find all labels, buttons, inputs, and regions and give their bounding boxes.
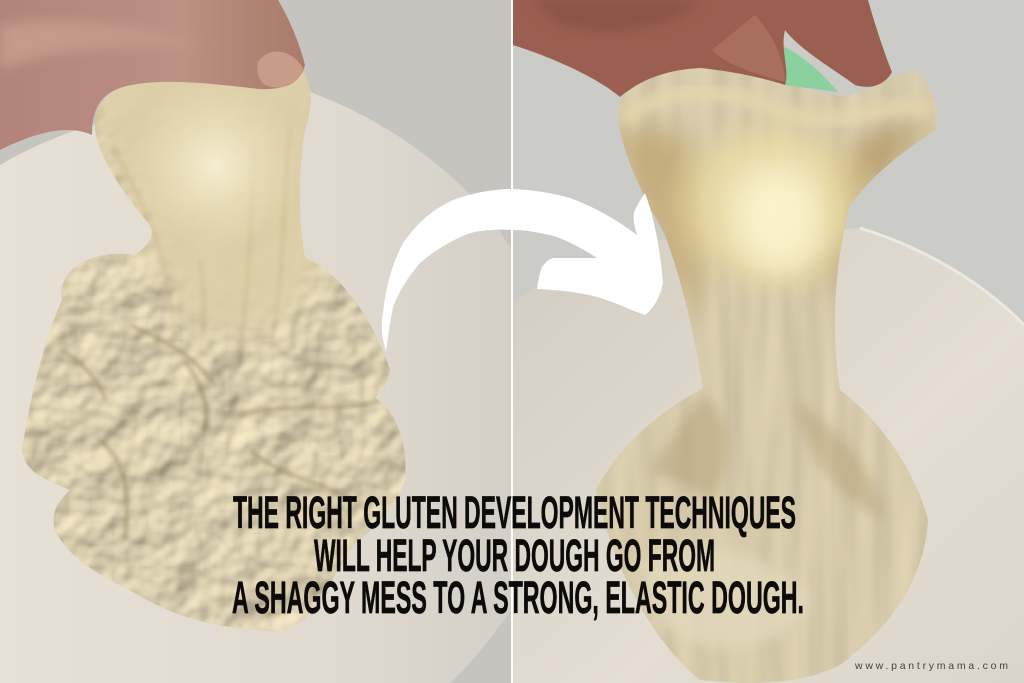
elastic dough xyxy=(590,60,940,683)
panel: left photo, shaggy dough xyxy=(0,0,511,683)
arrow: curved white arrow from left to right xyxy=(382,189,663,351)
shaggy dough mass xyxy=(22,71,406,632)
bright bowl rim xyxy=(860,228,1024,325)
upper dough edge shading xyxy=(610,120,940,330)
panel: right photo, strong elastic dough xyxy=(513,0,1024,683)
translucent glow in stretched dough xyxy=(670,126,870,282)
white mixing bowl left xyxy=(0,92,511,683)
caption text xyxy=(232,487,804,623)
hand pinching dough left xyxy=(0,0,305,150)
hand pinching dough right xyxy=(513,0,892,97)
dark crevices xyxy=(60,325,380,540)
white mixing bowl right xyxy=(513,228,1024,683)
counter background left xyxy=(0,0,511,683)
counter background right xyxy=(513,0,1024,323)
dough rim highlight xyxy=(625,93,930,120)
translucent glow in stretched dough xyxy=(158,108,272,222)
fingernail xyxy=(257,52,303,88)
green object behind hand xyxy=(784,46,838,92)
strand fibres xyxy=(115,130,290,350)
watermark url: www.pantrymama.com xyxy=(854,660,1008,672)
stretched strand xyxy=(95,72,324,333)
dough neck folds xyxy=(640,392,885,648)
